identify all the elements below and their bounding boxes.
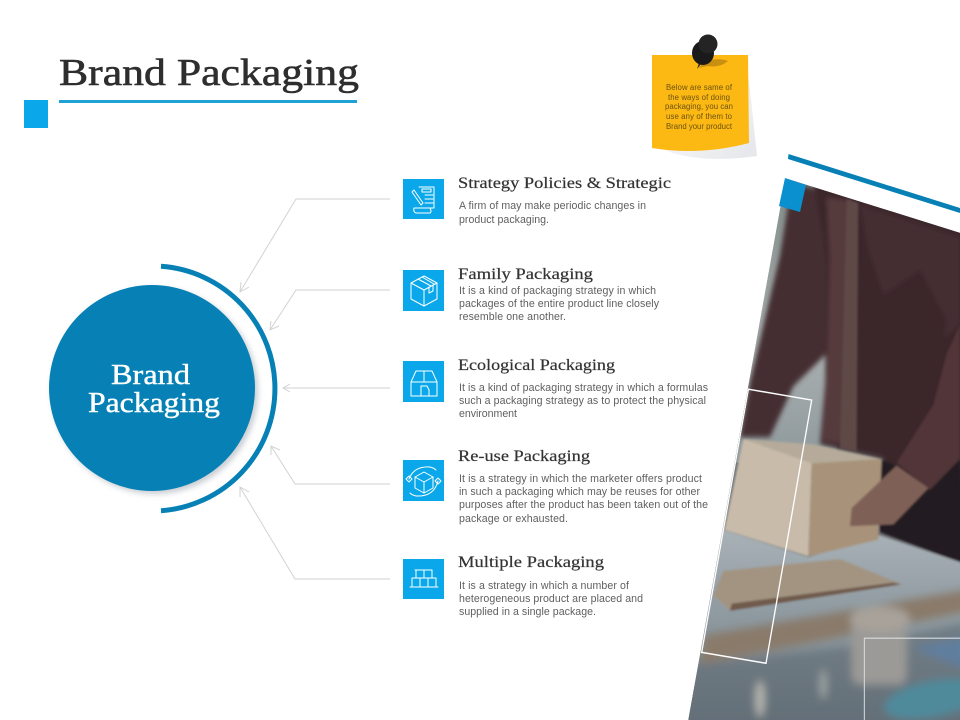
description [459, 200, 646, 226]
description: resemble one another. [459, 311, 566, 323]
icon: push pin [692, 34, 728, 69]
description: It is a strategy in which the marketer offers product [459, 473, 702, 485]
heading: Strategy Policies & Strategic [458, 175, 671, 192]
note text: use any of them to [666, 112, 733, 121]
table [680, 528, 960, 720]
photo: person packing a box [680, 172, 960, 720]
arrow: re-use packaging [271, 446, 390, 484]
heading: Re-use Packaging [458, 448, 590, 465]
jar [852, 615, 907, 684]
icon: box with cycle arrows [403, 460, 444, 501]
envelope [713, 559, 902, 611]
description: A firm of may make periodic changes in [459, 200, 646, 212]
hub arc [161, 266, 275, 511]
note text [665, 83, 733, 131]
item: strategy policies [403, 175, 671, 226]
title: Brand Packaging [59, 52, 359, 94]
icon: stacked boxes [403, 559, 444, 599]
tube [700, 590, 960, 664]
description: packages of the entire product line closely [459, 298, 660, 310]
arrow: ecological packaging [283, 384, 390, 392]
description: heterogeneous product are placed and [459, 593, 643, 605]
table foreground [680, 623, 960, 720]
description: supplied in a single package. [459, 606, 596, 618]
plate [882, 676, 960, 720]
white frame left [702, 389, 812, 663]
note paper [652, 55, 749, 151]
arrow: strategy policies [240, 199, 390, 292]
photo corner square [779, 178, 806, 212]
left sleeve [740, 183, 837, 437]
description [459, 473, 708, 525]
item: ecological packaging [403, 357, 708, 420]
box [743, 439, 882, 464]
note shadow paper [664, 70, 757, 159]
white frame bottom right [864, 638, 960, 720]
accent square [24, 100, 48, 128]
shirt body [813, 179, 960, 564]
note text: Brand your product [666, 122, 733, 131]
hand [850, 466, 928, 526]
right sleeve [897, 324, 960, 490]
item: multiple packaging [403, 554, 643, 618]
note text: the ways of doing [668, 93, 730, 102]
description [459, 285, 660, 323]
icon: document checklist [403, 179, 444, 219]
hub label: Brand [111, 360, 190, 391]
arrow: multiple packaging [240, 487, 390, 579]
description: It is a kind of packaging strategy in which a formulas [459, 382, 708, 394]
icon: box [403, 270, 444, 311]
hub label [88, 360, 220, 419]
description: purposes after the product has been taken out of the [459, 499, 708, 511]
description: environment [459, 408, 517, 420]
description [459, 580, 643, 618]
description [459, 382, 708, 420]
description: It is a strategy in which a number of [459, 580, 629, 592]
hub: brand packaging circle [49, 266, 275, 511]
sticky note [652, 34, 757, 159]
description: in such a packaging which may be reuses for other [459, 486, 700, 498]
heading: Multiple Packaging [458, 554, 604, 571]
note text: packaging, you can [665, 102, 733, 111]
heading: Family Packaging [458, 266, 593, 283]
note text: Below are same of [666, 83, 733, 92]
description: product packaging. [459, 214, 549, 226]
item: re-use packaging [403, 448, 708, 525]
shirt folds [864, 210, 958, 330]
description: such a packaging strategy as to protect the physical [459, 395, 706, 407]
description: It is a kind of packaging strategy in which [459, 285, 656, 297]
hub label: Packaging [88, 388, 220, 419]
arrow: family packaging [270, 290, 390, 330]
hub shadow [52, 288, 258, 494]
item: family packaging [403, 266, 660, 323]
icon: open box [403, 361, 444, 402]
heading: Ecological Packaging [458, 357, 615, 374]
placket [840, 199, 858, 452]
hub disc [49, 285, 255, 491]
accent line above photo [788, 154, 960, 213]
description: package or exhausted. [459, 513, 568, 525]
